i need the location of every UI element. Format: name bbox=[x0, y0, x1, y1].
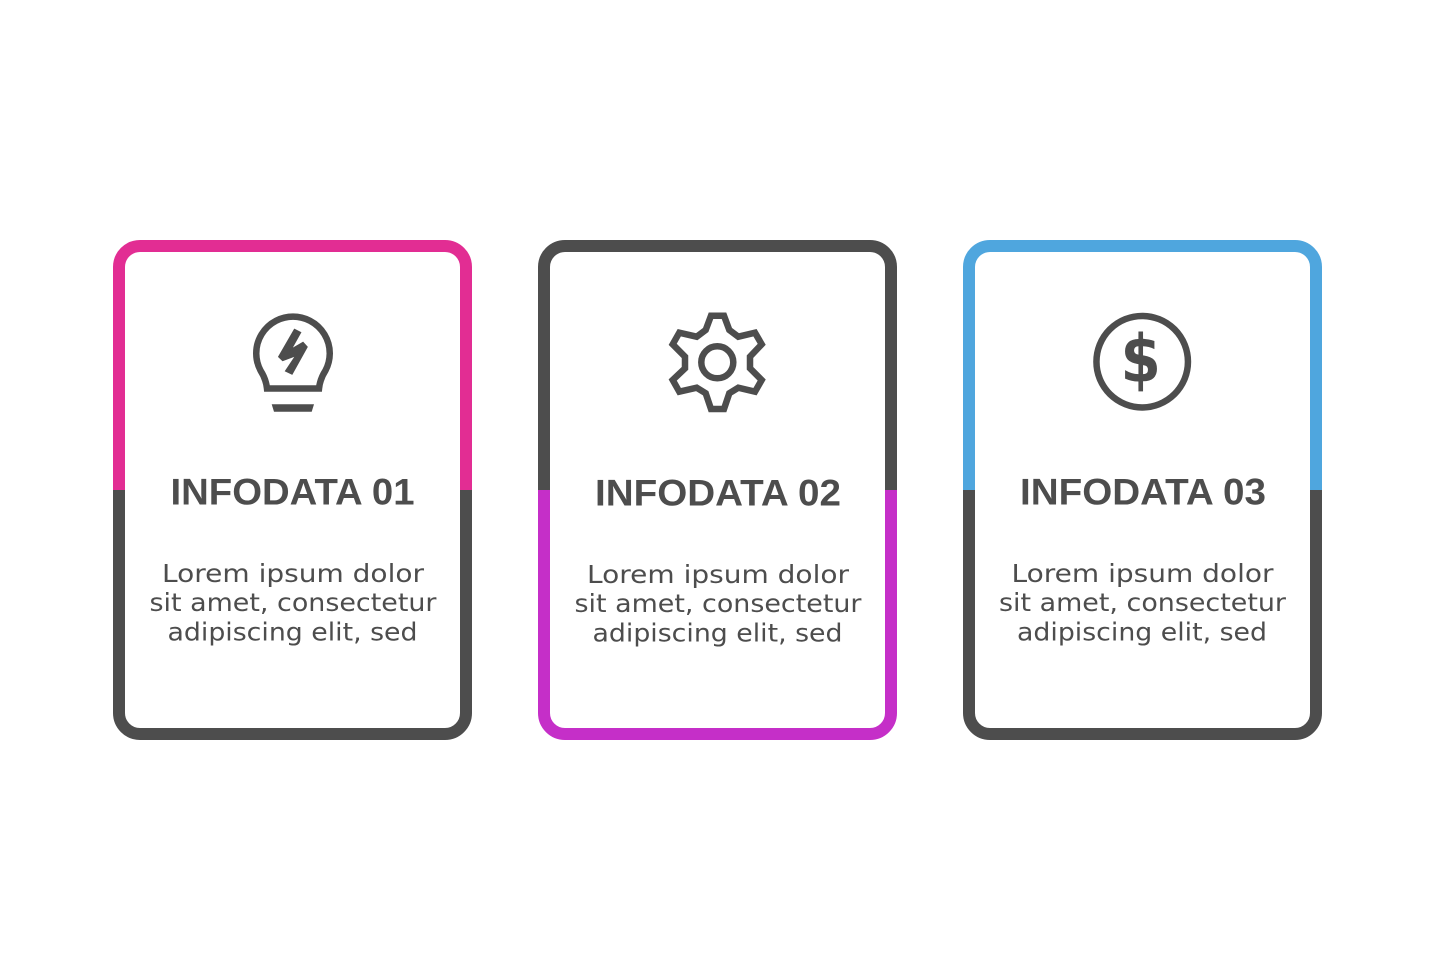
body text: infodata 02: Lorem ipsum dolor bbox=[587, 560, 850, 589]
card outline bottom: magenta bbox=[544, 490, 891, 734]
body text: infodata 01: adipiscing elit, sed bbox=[168, 618, 418, 646]
panel: infodata 01 bbox=[119, 246, 466, 734]
body text: infodata 03: adipiscing elit, sed bbox=[1017, 618, 1267, 646]
body text: infodata 01: sit amet, consectetur bbox=[150, 588, 438, 617]
icon: gear bbox=[673, 316, 762, 409]
panel: infodata 03 bbox=[969, 246, 1316, 734]
card outline bottom: grey bbox=[969, 490, 1316, 734]
card outline bottom: grey bbox=[119, 490, 466, 734]
icon: light bulb bbox=[256, 317, 330, 412]
panel: infodata 02 bbox=[544, 246, 891, 734]
body text: infodata 02: adipiscing elit, sed bbox=[592, 618, 842, 648]
heading: infodata 01: INFODATA 01 bbox=[170, 470, 414, 512]
body text: infodata 01: Lorem ipsum dolor bbox=[162, 559, 425, 588]
body text: infodata 02: sit amet, consectetur bbox=[574, 589, 863, 618]
card outline top: pink bbox=[119, 246, 466, 490]
body text: infodata 03 bbox=[999, 559, 1287, 646]
card outline top: grey bbox=[544, 246, 891, 490]
body text: infodata 01 bbox=[150, 559, 438, 646]
body text: infodata 02 bbox=[574, 560, 863, 648]
body text: infodata 03: Lorem ipsum dolor bbox=[1012, 559, 1275, 588]
body text: infodata 03: sit amet, consectetur bbox=[999, 588, 1287, 617]
icon: dollar coin bbox=[1096, 316, 1188, 407]
heading: infodata 02: INFODATA 02 bbox=[595, 472, 841, 514]
heading: infodata 03: INFODATA 03 bbox=[1020, 470, 1266, 512]
card outline top: blue bbox=[969, 246, 1316, 490]
icon: dollar coin: $ bbox=[1120, 320, 1161, 397]
